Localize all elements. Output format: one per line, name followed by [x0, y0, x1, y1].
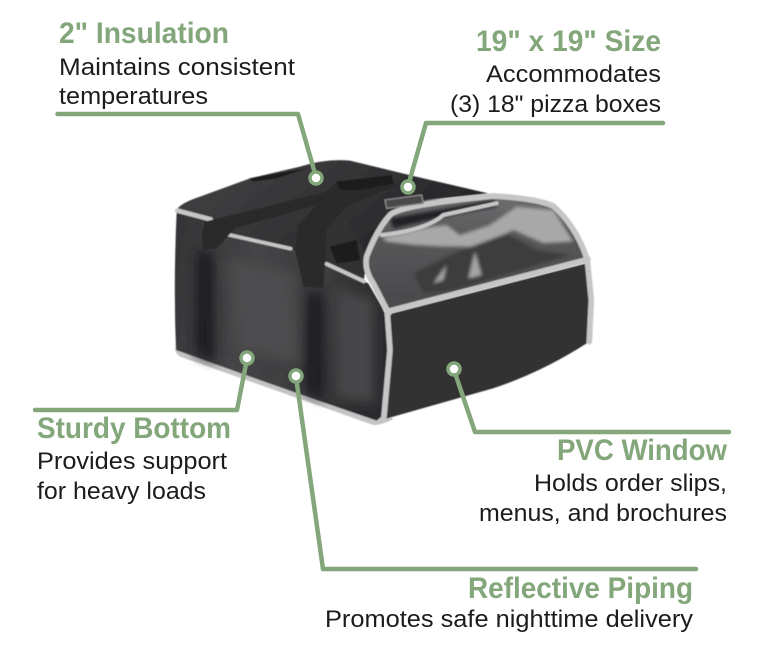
callout: PVC window: [448, 363, 729, 527]
description: Maintains consistent: [59, 54, 295, 81]
description: menus, and brochures: [479, 500, 727, 527]
leader line: [296, 377, 696, 569]
callout: 2" insulation: [58, 17, 322, 184]
leader dot: [402, 181, 414, 193]
front face fold shading: [195, 250, 373, 403]
grey piping: [177, 196, 591, 417]
leader line: [408, 123, 663, 186]
description: Provides support: [37, 448, 227, 475]
bag bottom piping: [175, 345, 393, 425]
heading: 2" Insulation: [59, 17, 229, 50]
description: (3) 18" pizza boxes: [450, 91, 661, 118]
description: Accommodates: [486, 61, 661, 88]
callout: 19" x 19" size: [402, 25, 663, 193]
bag front face: [175, 212, 389, 421]
leader line: [454, 370, 729, 432]
leader dot: [241, 352, 253, 364]
callout: reflective piping: [290, 370, 696, 633]
buckle: [385, 195, 423, 208]
PVC window: [364, 195, 588, 313]
heading: Reflective Piping: [468, 572, 693, 605]
carry straps: [202, 175, 397, 288]
leader dot: [310, 172, 322, 184]
leader line: [58, 114, 316, 177]
zipper pull: [249, 168, 307, 182]
pizza delivery bag photo: [175, 160, 592, 425]
description: Promotes safe nighttime delivery: [325, 606, 693, 633]
leader line: [35, 359, 247, 410]
heading: PVC Window: [557, 434, 728, 467]
callout: sturdy bottom: [35, 352, 253, 505]
right lower panel: [384, 263, 592, 419]
bag top surface: [177, 160, 488, 283]
leader dot: [290, 370, 302, 382]
heading: Sturdy Bottom: [37, 412, 231, 445]
description: for heavy loads: [37, 478, 206, 505]
description: Holds order slips,: [534, 470, 727, 497]
description: temperatures: [59, 83, 208, 110]
gusset behind handle: [323, 220, 367, 278]
leader dot: [448, 363, 460, 375]
window reflections: [382, 200, 573, 293]
heading: 19" x 19" Size: [476, 25, 661, 58]
